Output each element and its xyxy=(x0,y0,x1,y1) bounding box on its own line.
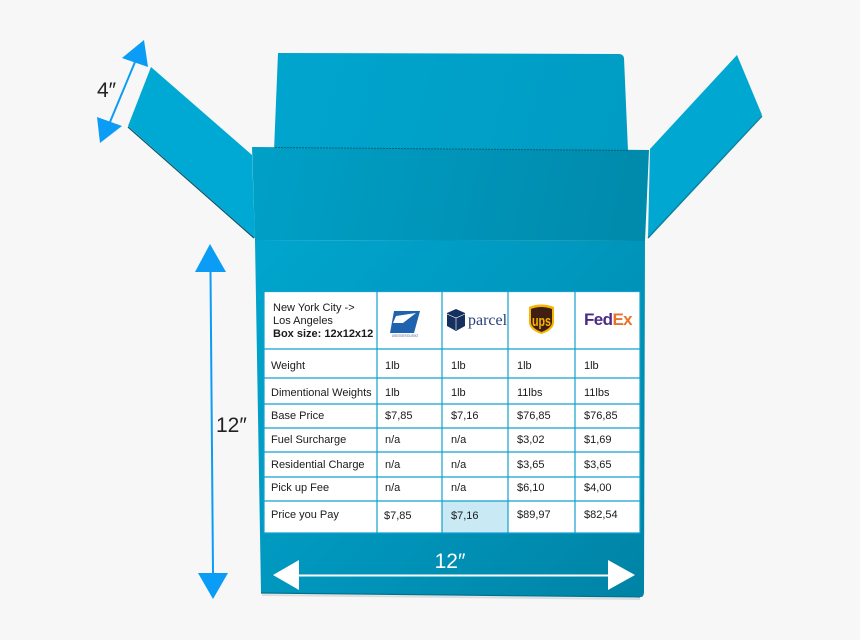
row: Dimentional Weights xyxy=(271,387,610,399)
arrow: 12 inch height xyxy=(195,244,228,599)
row: Dimentional Weights: 11lbs xyxy=(517,387,543,399)
front band of box xyxy=(252,147,649,241)
route and box size header xyxy=(273,302,373,340)
row: Price you Pay: $7,16 xyxy=(451,510,479,522)
logo: UPS: ups xyxy=(532,313,551,330)
label: 4 inches: 4″ xyxy=(97,79,117,102)
row: Base Price: $7,85 xyxy=(385,410,413,422)
right flap xyxy=(648,55,762,238)
logo: parcel: parcel xyxy=(468,312,508,329)
price table xyxy=(264,291,640,533)
row: Price you Pay xyxy=(271,509,618,522)
row: Residential Charge: $3,65 xyxy=(517,459,545,471)
row: Fuel Surcharge: $3,02 xyxy=(517,434,545,446)
label: 12 inches width: 12″ xyxy=(435,550,466,573)
logo: parcel xyxy=(447,309,508,331)
row: Fuel Surcharge xyxy=(271,434,612,446)
row: Base Price: $76,85 xyxy=(517,410,551,422)
arrow: 4 inch flap depth xyxy=(97,40,148,143)
row: Pick up Fee: $6,10 xyxy=(517,482,545,494)
row: Fuel Surcharge: Fuel Surcharge xyxy=(271,434,346,446)
row: Residential Charge: Residential Charge xyxy=(271,459,365,471)
logo: UPS xyxy=(529,304,554,334)
route and box size header: Box size: 12x12x12 xyxy=(273,328,373,340)
label: 12 inches height: 12″ xyxy=(216,414,247,437)
row: Weight xyxy=(271,360,599,372)
row: Price you Pay: Price you Pay xyxy=(271,509,339,521)
row: Fuel Surcharge: n/a xyxy=(385,434,401,446)
row: Pick up Fee xyxy=(271,482,612,494)
route and box size header: Los Angeles xyxy=(273,315,333,327)
highlighted cheapest price cell xyxy=(442,501,508,533)
route and box size header: New York City -> xyxy=(273,302,355,314)
row: Base Price: $7,16 xyxy=(451,410,479,422)
row: Dimentional Weights: 11lbs xyxy=(584,387,610,399)
logo: USPS xyxy=(390,311,420,338)
row: Weight: 1lb xyxy=(584,360,599,372)
row: Residential Charge: $3,65 xyxy=(584,459,612,471)
row: Weight: Weight xyxy=(271,360,305,372)
row: Residential Charge: n/a xyxy=(385,459,401,471)
back flap xyxy=(274,53,628,151)
front panel of box xyxy=(255,240,645,599)
row: Pick up Fee: Pick up Fee xyxy=(271,482,329,494)
row: Base Price: $76,85 xyxy=(584,410,618,422)
row: Price you Pay: $82,54 xyxy=(584,509,618,521)
row: Price you Pay: $7,85 xyxy=(384,510,412,522)
price table: UNITED STATES POSTAL SERVICE xyxy=(392,334,418,338)
logo: FedEx: FedEx xyxy=(584,310,633,329)
arrow: 12 inch width xyxy=(273,560,635,590)
left flap xyxy=(128,67,255,238)
row: Pick up Fee: n/a xyxy=(385,482,401,494)
row: Price you Pay: $89,97 xyxy=(517,509,551,521)
row: Weight: 1lb xyxy=(451,360,466,372)
row: Fuel Surcharge: $1,69 xyxy=(584,434,612,446)
row: Pick up Fee: n/a xyxy=(451,482,467,494)
row: Dimentional Weights: 1lb xyxy=(385,387,400,399)
table grid xyxy=(264,291,640,533)
row: Base Price xyxy=(271,410,618,422)
row: Weight: 1lb xyxy=(385,360,400,372)
row: Dimentional Weights: Dimentional Weights xyxy=(271,387,372,399)
row: Pick up Fee: $4,00 xyxy=(584,482,612,494)
row: Weight: 1lb xyxy=(517,360,532,372)
row: Dimentional Weights: 1lb xyxy=(451,387,466,399)
row: Residential Charge xyxy=(271,459,612,471)
row: Base Price: Base Price xyxy=(271,410,324,422)
row: Residential Charge: n/a xyxy=(451,459,467,471)
row: Fuel Surcharge: n/a xyxy=(451,434,467,446)
